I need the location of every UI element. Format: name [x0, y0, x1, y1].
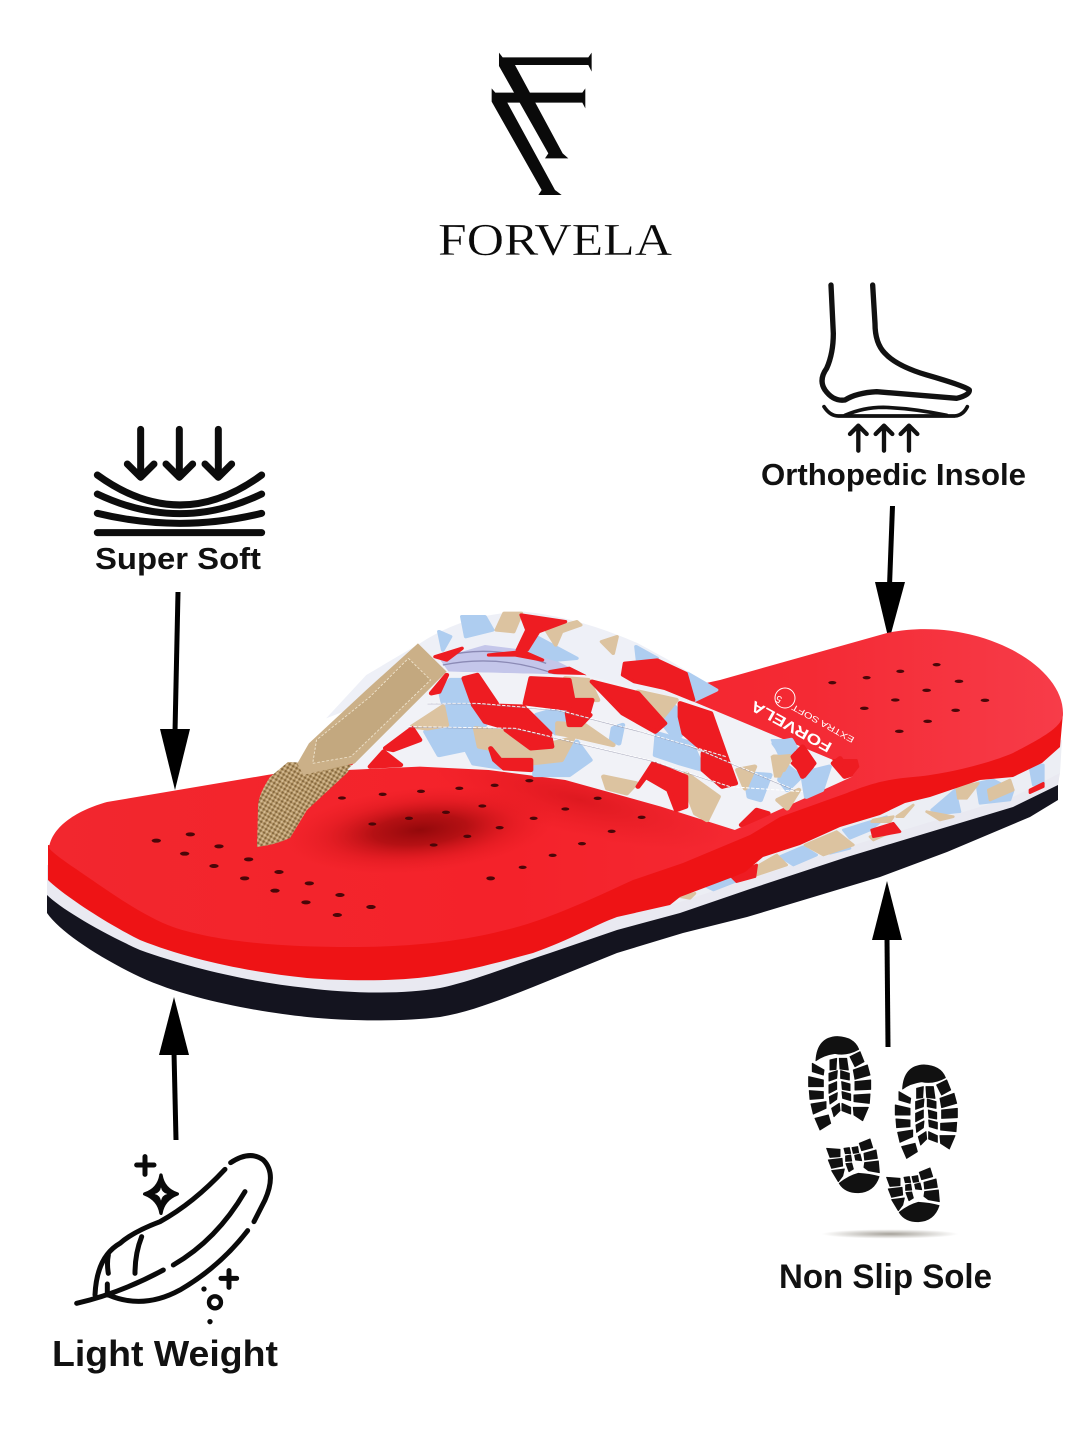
arrow [875, 506, 905, 641]
icon: feather [77, 1156, 270, 1324]
callout: super soft [95, 429, 262, 790]
callout: light weight [52, 997, 278, 1374]
red foam side wall [48, 713, 1063, 980]
leather thong cover [297, 643, 447, 775]
strap tip detail [772, 740, 858, 777]
product: red flip flop sandal [47, 612, 1063, 1020]
footbed print: brand [748, 688, 856, 755]
label: Super Soft [95, 541, 261, 576]
footbed print: brand: EXTRA SOFT [790, 702, 856, 745]
callout: non slip sole [779, 881, 992, 1296]
webbing thong [257, 762, 353, 847]
arrow [159, 997, 189, 1140]
arrow [872, 881, 902, 1047]
callout: orthopedic insole [761, 285, 1026, 641]
navy outsole [47, 780, 1058, 1020]
arrow [160, 592, 190, 790]
icon: soft layers [97, 429, 262, 533]
label: Non Slip Sole [779, 1258, 992, 1296]
midsole patches [680, 765, 1043, 898]
strap: back section [326, 612, 718, 718]
red footbed top [49, 629, 1063, 947]
brand name: FORVELA [438, 214, 672, 265]
label: Light Weight [52, 1333, 278, 1374]
footbed print: brand: 5 [774, 692, 784, 705]
footbed shadow [315, 775, 654, 864]
ventilation holes [152, 663, 989, 917]
brand logo [438, 53, 672, 265]
logo monogram [492, 53, 592, 195]
camouflage midsole layer [670, 740, 1062, 905]
footbed print: brand: FORVELA [748, 697, 835, 755]
icon: boot prints [809, 1037, 958, 1239]
white midsole stripe [47, 740, 1060, 993]
label: Orthopedic Insole [761, 457, 1026, 492]
strap: front padded section [347, 672, 852, 830]
icon: foot on insole [822, 285, 969, 451]
